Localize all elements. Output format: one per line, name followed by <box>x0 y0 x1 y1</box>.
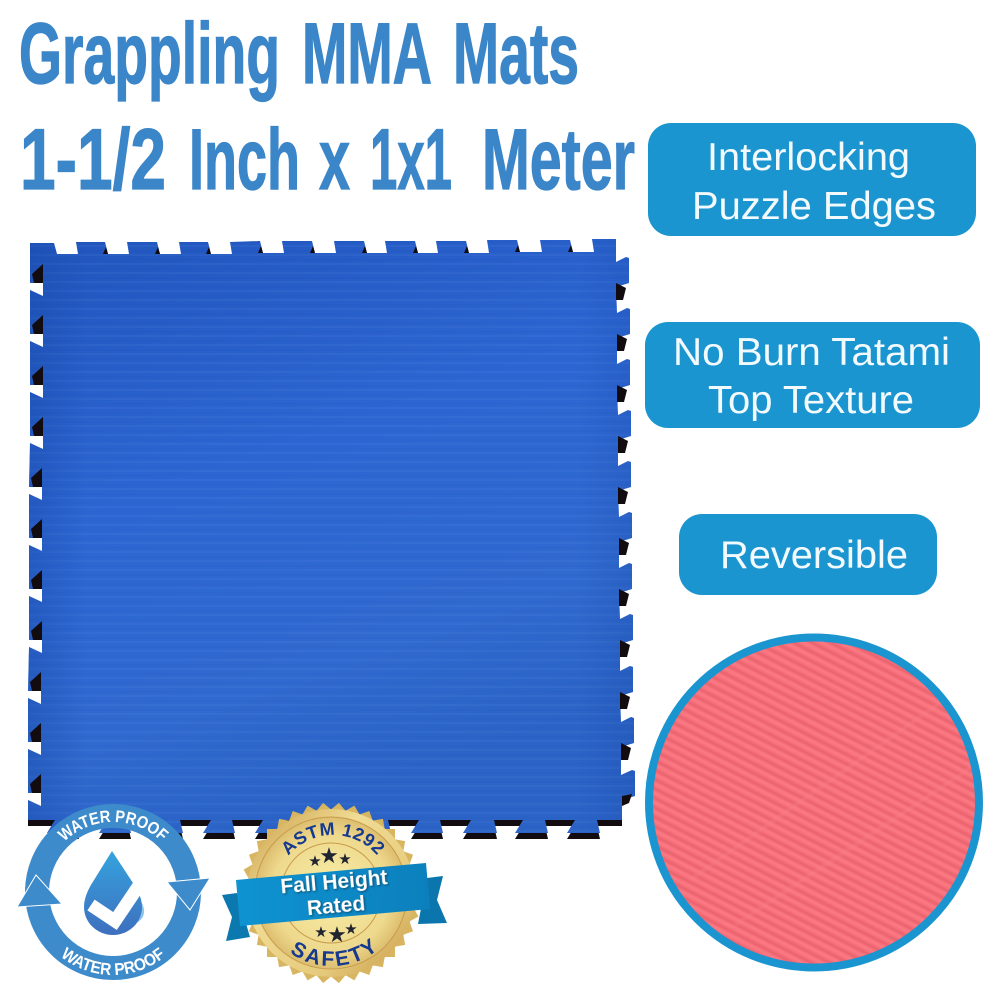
title line 2: 1x1 <box>370 112 452 208</box>
circular ring <box>37 816 189 968</box>
bottom stars <box>314 920 358 948</box>
water proof badge <box>18 804 209 980</box>
top stars <box>308 844 352 870</box>
left arrow <box>17 875 62 907</box>
right arrow <box>167 878 210 910</box>
title line 1: Grappling <box>19 6 280 102</box>
seal starburst <box>241 803 421 983</box>
callout: interlocking puzzle edges: Puzzle Edges <box>692 185 936 228</box>
icon: small light droplet <box>120 898 144 927</box>
callout: reversible: Reversible <box>720 534 908 577</box>
callout: interlocking puzzle edges: Interlocking <box>707 136 910 179</box>
callout: no burn tatami top texture: Top Texture <box>708 379 914 422</box>
title line 2: 1-1/2 <box>20 112 166 208</box>
callout: reversible <box>679 514 937 595</box>
blue puzzle mat <box>25 235 640 840</box>
title line 2: Meter <box>482 112 635 208</box>
ribbon band <box>236 863 430 926</box>
top stars: ★ <box>308 852 322 870</box>
title line 1: Mats <box>453 6 579 102</box>
icon: check mark <box>91 875 146 921</box>
bottom stars: ★ <box>327 923 347 948</box>
bottom stars: ★ <box>314 923 328 941</box>
callout: interlocking puzzle edges <box>648 123 976 236</box>
top stars: ★ <box>338 850 352 868</box>
ribbon right tail <box>418 876 447 924</box>
astm 1292 text: ASTM 1292 <box>283 822 384 856</box>
bottom stars: ★ <box>344 920 358 938</box>
astm safety seal <box>222 802 447 984</box>
title line 2: x <box>319 112 350 208</box>
top stars: ★ <box>319 844 339 869</box>
safety text: SAFETY <box>292 938 374 966</box>
fall height rated text: Fall Height <box>280 866 388 899</box>
red reverse side texture circle <box>640 628 990 978</box>
ribbon left tail <box>222 893 250 941</box>
title line 1: MMA <box>302 6 432 102</box>
callout: no burn tatami top texture <box>645 322 980 428</box>
callout: no burn tatami top texture: No Burn Tatami <box>673 331 950 374</box>
water proof bottom text: WATER PROOF <box>62 946 163 976</box>
fall height rated text <box>280 866 391 922</box>
water proof top text: WATER PROOF <box>56 810 169 840</box>
title line 2: Inch <box>189 112 300 208</box>
icon: water drop <box>84 851 142 935</box>
title line 2 <box>20 112 635 208</box>
fall height rated text: Rated <box>306 892 366 920</box>
title <box>19 6 635 208</box>
